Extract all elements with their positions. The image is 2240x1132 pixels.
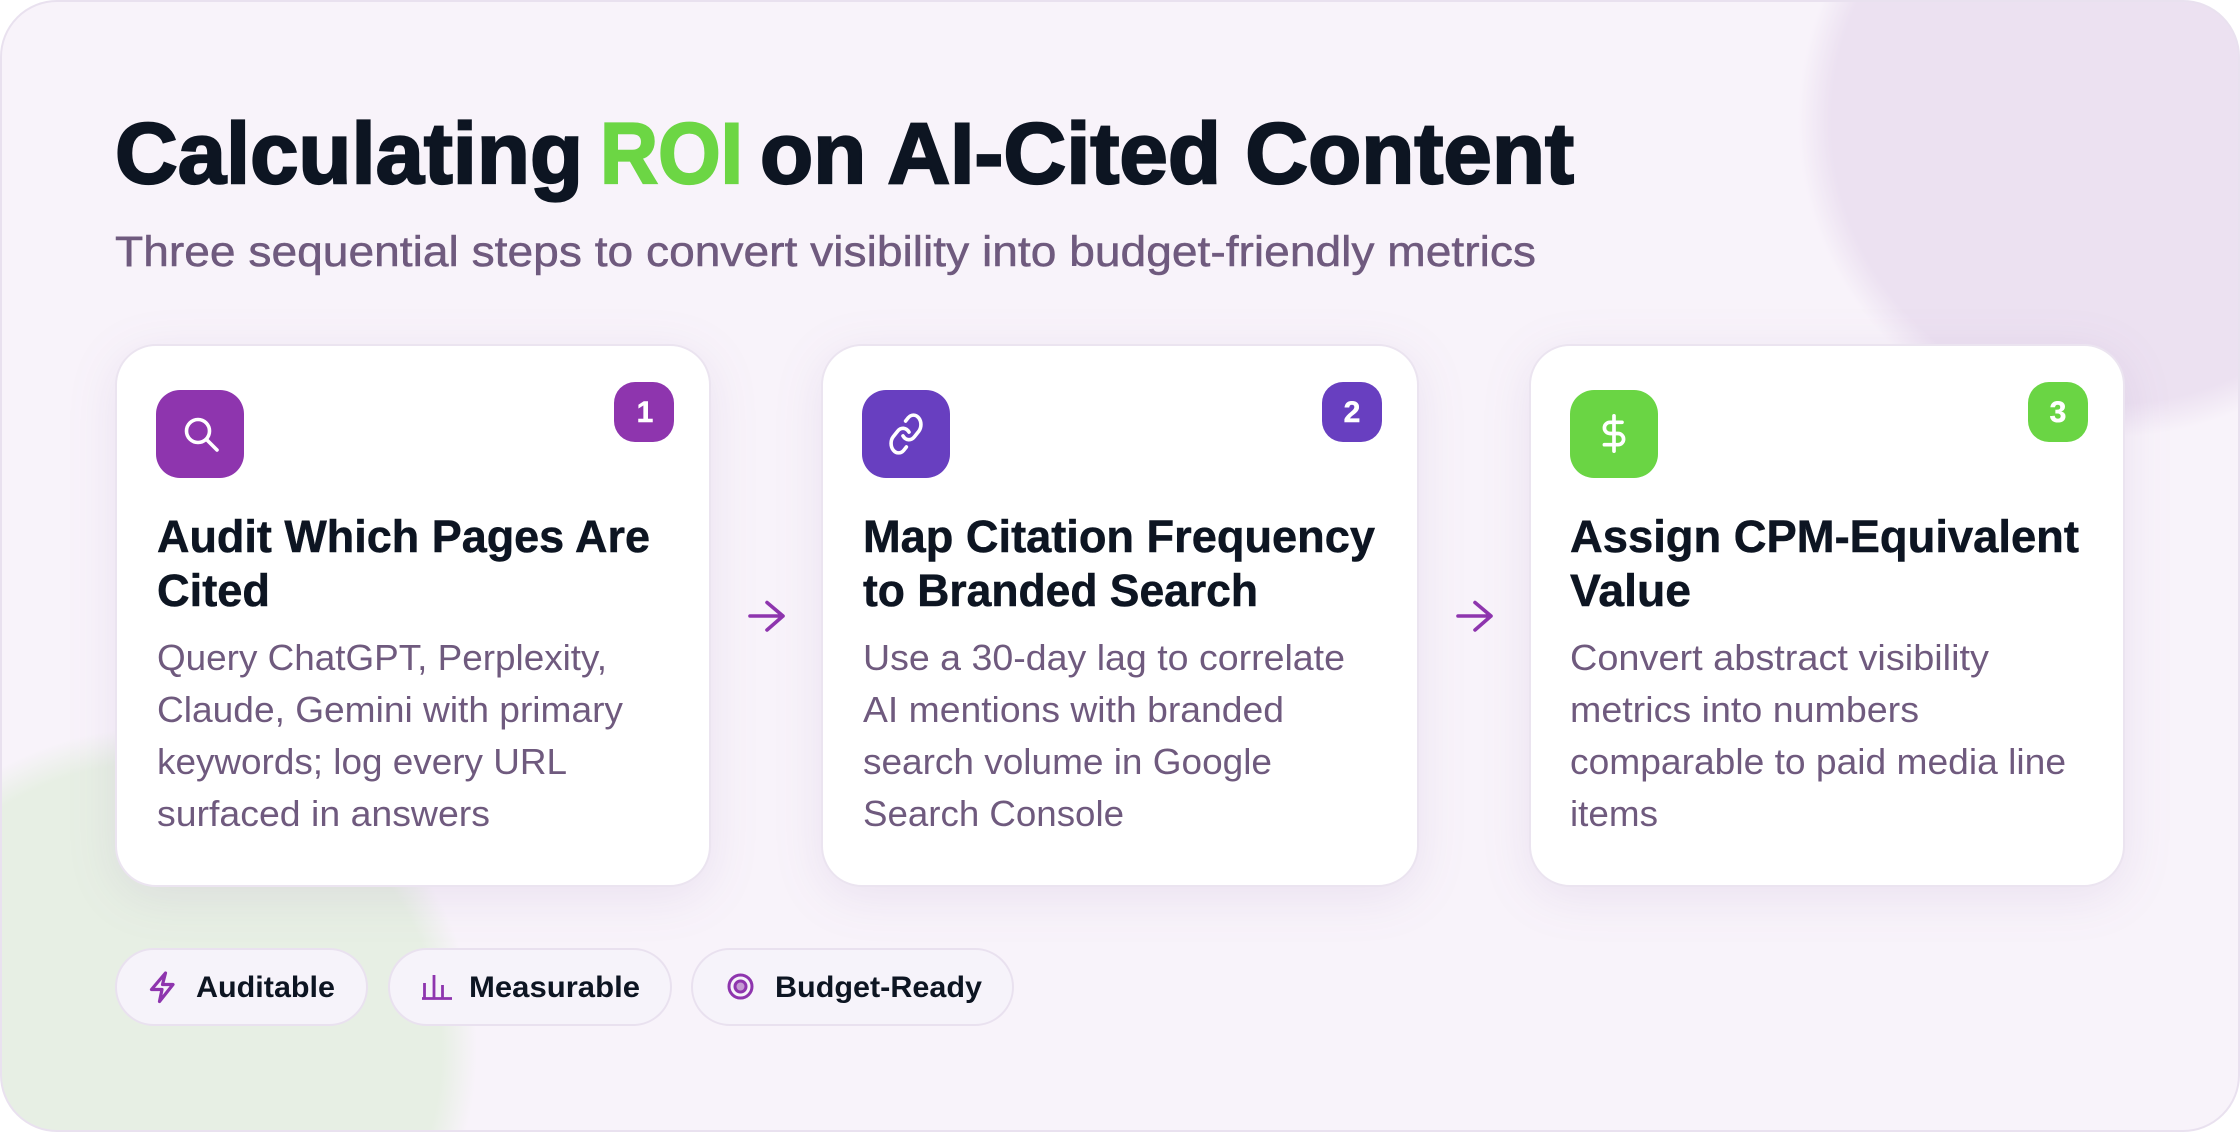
icon: search bbox=[156, 390, 244, 478]
body text: audit: Query ChatGPT, Perplexity, bbox=[157, 637, 607, 678]
icon: bar chart bbox=[422, 975, 452, 998]
step number 2: 2 bbox=[1344, 396, 1360, 429]
pill: budget-ready: Budget-Ready bbox=[775, 971, 982, 1004]
panel: step 3 assign bbox=[1530, 345, 2124, 886]
panel: step 2 map bbox=[822, 345, 1418, 886]
pill: auditable bbox=[116, 949, 367, 1025]
icon: target bbox=[729, 975, 752, 998]
pill: measurable: Measurable bbox=[469, 971, 640, 1004]
body text: audit: Claude, Gemini with primary bbox=[157, 689, 623, 730]
body text: audit bbox=[157, 637, 623, 834]
body text: audit: surfaced in answers bbox=[157, 793, 490, 834]
heading: audit: Cited bbox=[157, 565, 270, 616]
icon: dollar bbox=[1570, 390, 1658, 478]
heading: assign bbox=[1570, 511, 2079, 616]
body text: audit: keywords; log every URL bbox=[157, 741, 567, 782]
step number 1: 1 bbox=[637, 396, 653, 429]
step number 2 bbox=[1322, 382, 1382, 442]
arrow: step 2 to step 3 bbox=[1458, 602, 1491, 630]
step number 3 bbox=[2028, 382, 2088, 442]
heading: assign: Assign CPM-Equivalent bbox=[1570, 511, 2079, 562]
panel: step 1 audit bbox=[116, 345, 710, 886]
icon: link bbox=[862, 390, 950, 478]
heading: map: Map Citation Frequency bbox=[863, 511, 1375, 562]
title: ROI bbox=[600, 106, 743, 202]
heading: map bbox=[863, 511, 1375, 616]
title bbox=[115, 106, 1574, 202]
heading: audit bbox=[157, 511, 650, 616]
pill: budget-ready bbox=[692, 949, 1013, 1025]
body text: map: AI mentions with branded bbox=[863, 689, 1284, 730]
body text: assign: items bbox=[1570, 793, 1658, 834]
body text: assign: Convert abstract visibility bbox=[1570, 637, 1989, 678]
body text: map bbox=[863, 637, 1345, 834]
pill: auditable: Auditable bbox=[196, 971, 335, 1004]
arrow: step 1 to step 2 bbox=[750, 602, 783, 630]
body text: map: search volume in Google bbox=[863, 741, 1272, 782]
subtitle: Three sequential steps to convert visibility into budget-friendly metrics bbox=[115, 228, 1536, 276]
heading: map: to Branded Search bbox=[863, 565, 1258, 616]
step number 1 bbox=[614, 382, 674, 442]
title: on AI-Cited Content bbox=[760, 106, 1574, 202]
body text: assign: metrics into numbers bbox=[1570, 689, 1919, 730]
body text: assign bbox=[1570, 637, 2066, 834]
step number 3: 3 bbox=[2050, 396, 2066, 429]
body text: map: Use a 30-day lag to correlate bbox=[863, 637, 1345, 678]
heading: audit: Audit Which Pages Are bbox=[157, 511, 650, 562]
body text: map: Search Console bbox=[863, 793, 1124, 834]
heading: assign: Value bbox=[1570, 565, 1691, 616]
pill: measurable bbox=[389, 949, 671, 1025]
title: Calculating bbox=[115, 106, 583, 202]
icon: lightning bolt bbox=[152, 973, 173, 1002]
body text: assign: comparable to paid media line bbox=[1570, 741, 2066, 782]
